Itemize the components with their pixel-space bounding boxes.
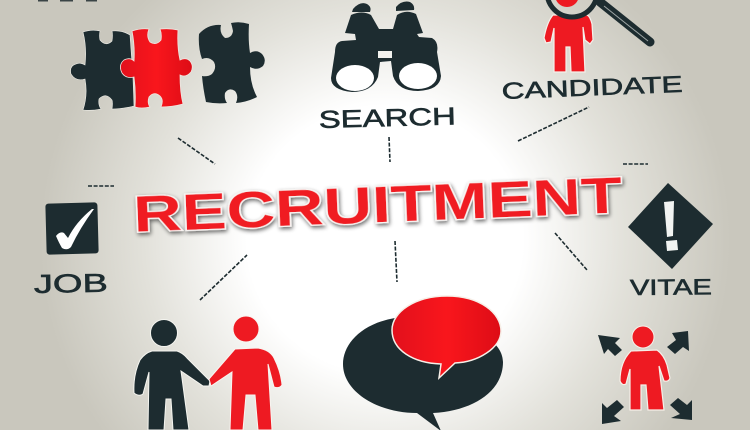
icon: vitae warning diamond (628, 183, 713, 269)
cropped label remnant at top edge (38, 0, 97, 2)
icon: handshake people (134, 316, 282, 430)
title: RECRUITMENT: RECRUITMENT (132, 166, 623, 243)
icon: job checkbox (45, 202, 99, 255)
label: VITAE: VITAE (630, 274, 712, 300)
icon: binoculars (331, 2, 441, 92)
label: SEARCH: SEARCH (318, 103, 456, 134)
label: JOB: JOB (34, 268, 108, 299)
icon: speech bubbles (343, 296, 503, 430)
icon: candidate under magnifier (544, 0, 650, 72)
label: CANDIDATE: CANDIDATE (501, 71, 683, 104)
icon: puzzle pieces (71, 22, 265, 110)
dashed connector lines (88, 107, 648, 300)
icon: person with arrows (598, 326, 692, 424)
